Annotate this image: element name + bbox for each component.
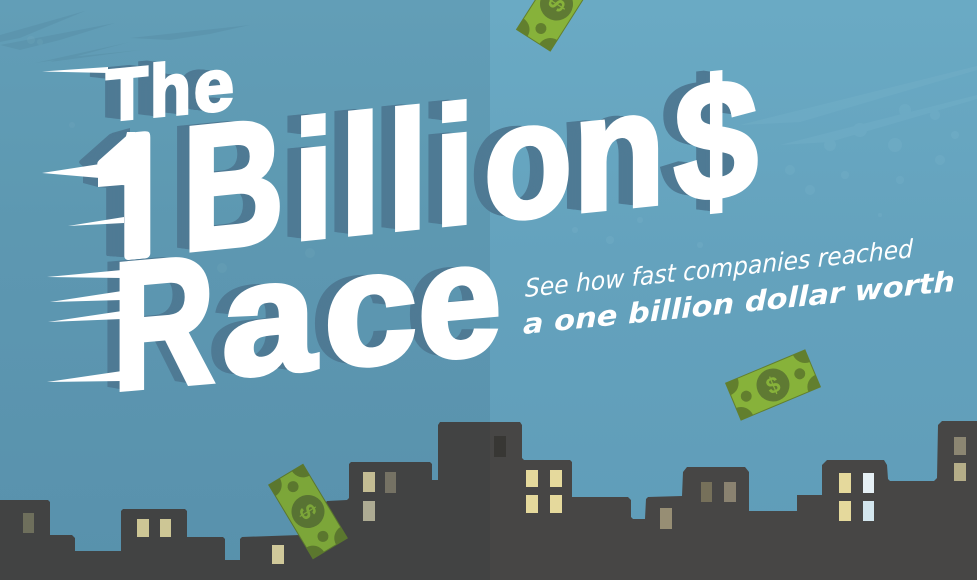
title line: 1 Billion$: B <box>182 80 284 289</box>
title line: 1 Billion$: l <box>340 80 381 270</box>
title line: 1 Billion$ <box>76 41 758 289</box>
title line: 1 Billion$: n <box>573 54 665 246</box>
title line: Race: a <box>222 223 316 411</box>
dollar bill: top, cropped by page edge <box>516 0 584 52</box>
title line: 1 Billion$: i <box>293 85 334 275</box>
title line: Race: R <box>112 216 215 429</box>
title line: Race: e <box>418 206 501 394</box>
title line: The: T <box>106 52 148 137</box>
brush texture <box>0 11 977 273</box>
dollar bill: right <box>725 349 821 421</box>
darker left half panel <box>0 0 490 580</box>
title line: The <box>90 44 233 137</box>
dollar bill: right: $ <box>762 370 784 399</box>
title line: 1 Billion$: 1 <box>76 116 190 286</box>
subtitle line 2: a one billion dollar worth <box>523 265 955 341</box>
title line: 1 Billion$: o <box>484 64 572 255</box>
title line: 1 Billion$: l <box>387 75 428 266</box>
dollar bill: lower left <box>268 464 348 560</box>
title <box>76 41 758 429</box>
title line: 1 Billion$: $ <box>674 41 757 238</box>
building windows <box>23 436 966 564</box>
title line: Race: c <box>324 214 417 402</box>
title line: Race <box>108 206 501 429</box>
title line: 1 Billion$: i <box>434 71 475 261</box>
subtitle line 1: See how fast companies reached <box>525 234 914 303</box>
city skyline <box>0 421 977 580</box>
dollar bill: lower left: $ <box>294 499 323 524</box>
title line: The: e <box>194 44 233 128</box>
title line: The: h <box>150 48 191 133</box>
